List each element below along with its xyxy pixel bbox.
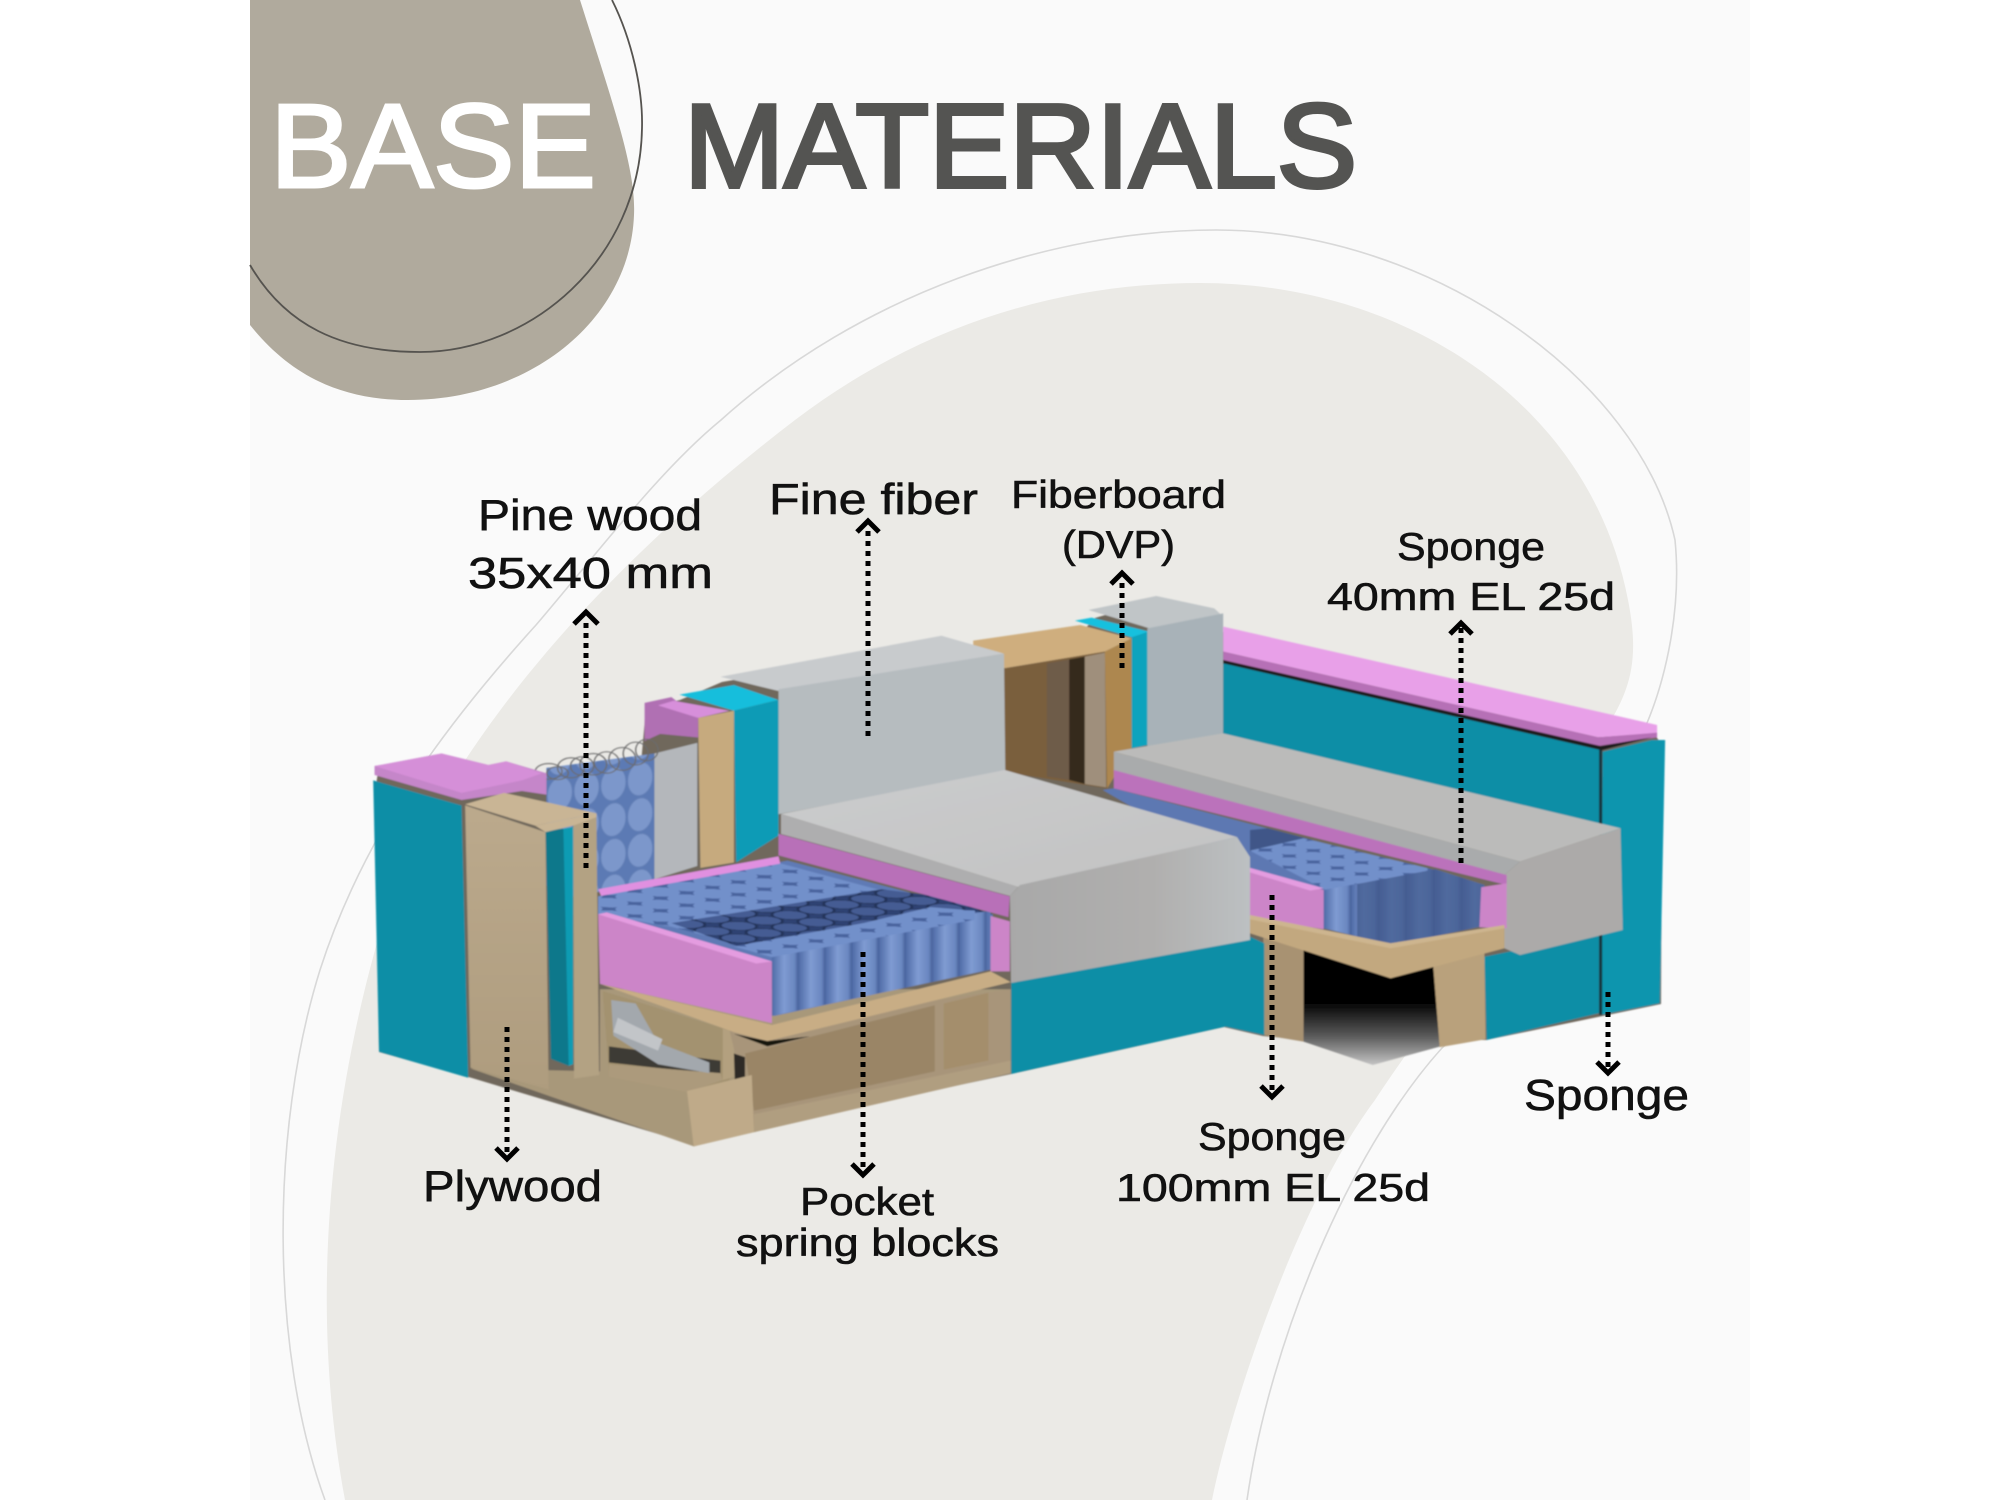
plywood floor [471, 989, 1011, 1146]
rear section: shelf, pillar, backrest [973, 596, 1665, 1074]
label: sponge 40mm: Sponge [1397, 526, 1545, 569]
left section: armrest, frame, springs [373, 636, 1011, 1146]
label: sponge 40mm [1327, 526, 1615, 619]
centre seat cushion [781, 770, 1250, 983]
label: sponge 40mm: 40mm EL 25d [1327, 576, 1615, 619]
arrow: pocket spring blocks [852, 952, 874, 1175]
label: sponge 100mm [1116, 1116, 1430, 1210]
under-seat box [729, 989, 1011, 1132]
sofa cutaway illustration [373, 596, 1665, 1146]
label: fiberboard: Fiberboard [1011, 474, 1226, 517]
mechanism compartment [603, 991, 729, 1091]
tan corner circle [250, 0, 634, 400]
label: pine wood: Pine wood [478, 491, 702, 540]
label: pocket spring blocks [736, 1181, 999, 1265]
coil springs top [535, 739, 658, 780]
arrow: fine fiber [857, 521, 879, 736]
label: fiberboard [1011, 474, 1226, 567]
label: sponge outer: Sponge [1524, 1071, 1689, 1120]
title: BASE: BASE [270, 80, 596, 213]
label: pocket spring blocks: Pocket [800, 1181, 934, 1224]
label: plywood: Plywood [423, 1162, 602, 1211]
arrow: plywood [496, 1027, 518, 1159]
sofa silhouette underlay [376, 600, 1662, 1145]
title: MATERIALS: MATERIALS [684, 80, 1357, 213]
page panel background [250, 0, 1750, 1500]
arrow: sponge 100mm [1261, 895, 1283, 1097]
label: fiberboard: (DVP) [1062, 524, 1175, 567]
thin outline curve [283, 230, 1677, 1500]
label: pine wood: 35x40 mm [468, 549, 713, 598]
background blob [327, 283, 1633, 1500]
corner circle outline [250, 0, 642, 352]
label: sponge 100mm: 100mm EL 25d [1116, 1167, 1430, 1210]
arrow: sponge 40mm [1450, 623, 1472, 863]
arrow: fiberboard [1111, 573, 1133, 668]
label: pocket spring blocks: spring blocks [736, 1222, 999, 1265]
label: sponge 100mm: Sponge [1198, 1116, 1346, 1159]
label: fine fiber: Fine fiber [769, 475, 978, 524]
label: pine wood [468, 491, 713, 598]
arrow: pine wood [574, 612, 598, 868]
arrow: sponge outer [1597, 992, 1619, 1073]
